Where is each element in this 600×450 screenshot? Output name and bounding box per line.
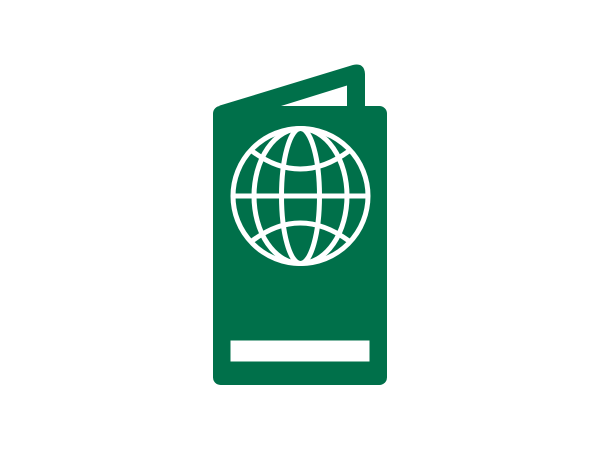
icon: globe	[233, 128, 368, 264]
name strip	[230, 340, 370, 362]
passport back flap	[220, 65, 364, 124]
passport cover	[213, 106, 387, 385]
